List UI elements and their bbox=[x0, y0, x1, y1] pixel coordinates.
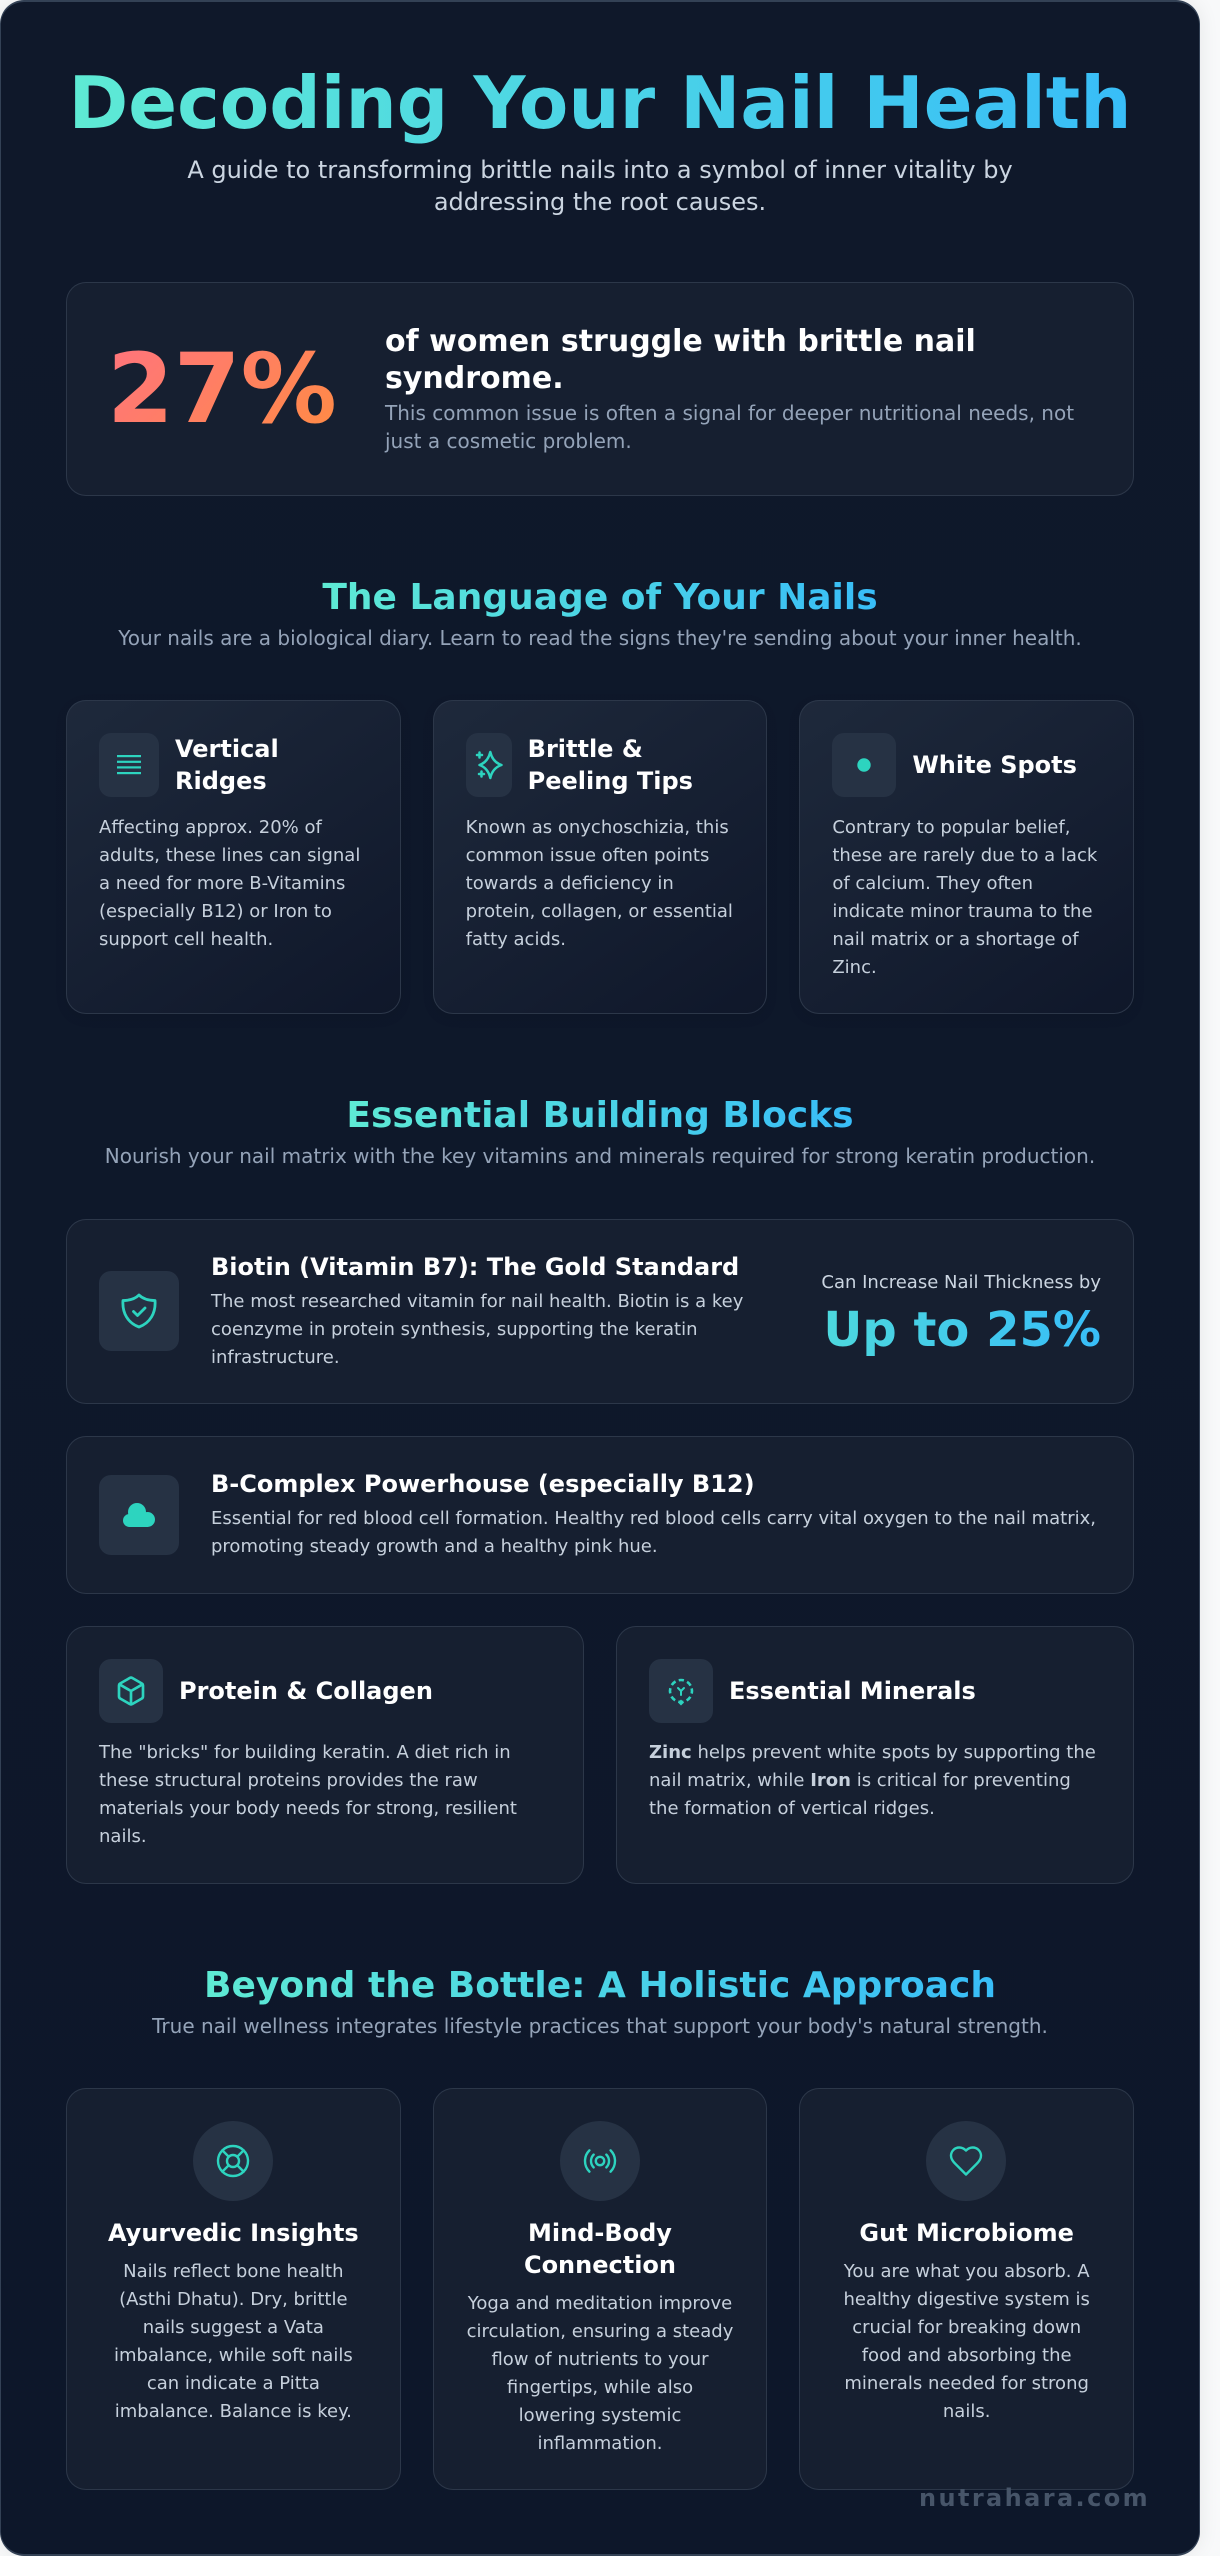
card text: minerals needed for strong bbox=[844, 2373, 1089, 2394]
card text: Zinc. bbox=[832, 957, 877, 978]
card title: Ayurvedic Insights bbox=[108, 2219, 359, 2247]
icon: shield bbox=[99, 1271, 179, 1351]
card text: materials your body needs for strong, resilient bbox=[99, 1798, 517, 1819]
b-complex title: B-Complex Powerhouse (especially B12) bbox=[211, 1470, 755, 1498]
card text: crucial for breaking down bbox=[852, 2317, 1081, 2338]
card text: fatty acids. bbox=[466, 929, 566, 950]
section subtitle: holistic: True nail wellness integrates lifestyle practices that support your body's natural strength. bbox=[152, 2014, 1048, 2038]
stat heading bbox=[385, 324, 976, 396]
panel: b-complex bbox=[66, 1436, 1134, 1594]
card text: indicate minor trauma to the bbox=[832, 901, 1093, 922]
card text bbox=[99, 817, 360, 950]
watermark: nutrahara.com bbox=[919, 2484, 1150, 2512]
panel: gut microbiome bbox=[799, 2088, 1134, 2490]
biotin stat value: Up to 25% bbox=[823, 1302, 1101, 1358]
card title bbox=[175, 735, 279, 795]
panel: vertical ridges bbox=[66, 700, 401, 1014]
card text bbox=[649, 1742, 1096, 1819]
card text bbox=[832, 817, 1098, 978]
panel: protein and collagen bbox=[66, 1626, 584, 1884]
card text: nail matrix, while Iron is critical for preventing bbox=[649, 1770, 1071, 1791]
stat heading: syndrome. bbox=[385, 361, 564, 396]
card title bbox=[528, 735, 693, 795]
card text: (especially B12) or Iron to bbox=[99, 901, 332, 922]
panel: biotin bbox=[66, 1219, 1134, 1404]
section heading: holistic: Beyond the Bottle: A Holistic Approach bbox=[204, 1965, 996, 2006]
icon: ridges bbox=[99, 733, 159, 797]
card text: these are rarely due to a lack bbox=[832, 845, 1097, 866]
card text bbox=[114, 2261, 353, 2422]
card text: nails. bbox=[943, 2401, 990, 2422]
icon: cloud bbox=[99, 1475, 179, 1555]
card text: (Asthi Dhatu). Dry, brittle bbox=[119, 2289, 348, 2310]
card text: common issue often points bbox=[466, 845, 709, 866]
card text: support cell health. bbox=[99, 929, 273, 950]
card title: Peeling Tips bbox=[528, 767, 693, 795]
icon: dashed mineral bbox=[649, 1659, 713, 1723]
card title bbox=[524, 2219, 676, 2279]
card text: Zinc helps prevent white spots by supporting the bbox=[649, 1742, 1096, 1763]
card text bbox=[98, 1742, 517, 1847]
biotin title: Biotin (Vitamin B7): The Gold Standard bbox=[211, 1253, 739, 1281]
card title: White Spots bbox=[912, 751, 1077, 779]
stat description bbox=[384, 401, 1074, 453]
biotin stat label: Can Increase Nail Thickness by bbox=[821, 1272, 1101, 1293]
card title: Connection bbox=[524, 2251, 676, 2279]
card text: nails. bbox=[99, 1826, 147, 1847]
card text: fingertips, while also bbox=[507, 2377, 693, 2398]
biotin text bbox=[210, 1291, 743, 1368]
panel: mind-body connection bbox=[433, 2088, 767, 2490]
card text: Contrary to popular belief, bbox=[832, 817, 1070, 838]
card text: of calcium. They often bbox=[832, 873, 1033, 894]
card text: circulation, ensuring a steady bbox=[467, 2321, 733, 2342]
biotin text: infrastructure. bbox=[211, 1347, 340, 1368]
biotin text: The most researched vitamin for nail health. Biotin is a key bbox=[211, 1291, 743, 1312]
subtitle: addressing the root causes. bbox=[434, 188, 766, 216]
card text: Affecting approx. 20% of bbox=[99, 817, 322, 838]
card text: You are what you absorb. A bbox=[844, 2261, 1090, 2282]
stat heading: of women struggle with brittle nail bbox=[385, 324, 976, 359]
panel: ayurvedic insights bbox=[66, 2088, 401, 2490]
card title: Mind-Body bbox=[528, 2219, 672, 2247]
card text: Yoga and meditation improve bbox=[468, 2293, 732, 2314]
card text: The "bricks" for building keratin. A diet rich in bbox=[99, 1742, 511, 1763]
b-complex text bbox=[211, 1508, 1096, 1557]
card text: nail matrix or a shortage of bbox=[832, 929, 1079, 950]
section subtitle: language: Your nails are a biological diary. Learn to read the signs they're sending about your inner health. bbox=[118, 626, 1082, 650]
card title: Ridges bbox=[175, 767, 267, 795]
card text: food and absorbing the bbox=[862, 2345, 1072, 2366]
card text: flow of nutrients to your bbox=[491, 2349, 708, 2370]
card title: Brittle & bbox=[528, 735, 643, 763]
card text: healthy digestive system is bbox=[843, 2289, 1090, 2310]
card text: nails suggest a Vata bbox=[143, 2317, 324, 2338]
section heading: building blocks: Essential Building Blocks bbox=[346, 1095, 854, 1136]
card text bbox=[843, 2261, 1090, 2422]
stat description: This common issue is often a signal for deeper nutritional needs, not bbox=[385, 401, 1074, 425]
panel: hero statistic bbox=[66, 282, 1134, 496]
card text: imbalance. Balance is key. bbox=[115, 2401, 352, 2422]
card text: these structural proteins provides the raw bbox=[99, 1770, 478, 1791]
card text: towards a deficiency in bbox=[466, 873, 674, 894]
icon: life buoy bbox=[193, 2121, 273, 2201]
card text: adults, these lines can signal bbox=[99, 845, 360, 866]
card title: Vertical bbox=[175, 735, 279, 763]
card text: a need for more B-Vitamins bbox=[99, 873, 345, 894]
panel: white spots bbox=[799, 700, 1134, 1014]
card title: Essential Minerals bbox=[729, 1677, 976, 1705]
stat description: just a cosmetic problem. bbox=[385, 429, 632, 453]
panel: essential minerals bbox=[616, 1626, 1134, 1884]
icon: sparkle bbox=[466, 733, 512, 797]
section subtitle: building blocks: Nourish your nail matrix with the key vitamins and minerals required for strong keratin production. bbox=[105, 1144, 1095, 1168]
card text bbox=[467, 2293, 733, 2454]
card title: Protein & Collagen bbox=[179, 1677, 433, 1705]
section heading: language: The Language of Your Nails bbox=[322, 577, 878, 618]
icon: cube bbox=[99, 1659, 163, 1723]
card text: the formation of vertical ridges. bbox=[649, 1798, 935, 1819]
card text: lowering systemic bbox=[519, 2405, 681, 2426]
icon: heart bbox=[926, 2121, 1006, 2201]
biotin text: coenzyme in protein synthesis, supporting the keratin bbox=[211, 1319, 698, 1340]
subtitle bbox=[187, 156, 1013, 216]
b-complex text: promoting steady growth and a healthy pink hue. bbox=[211, 1536, 658, 1557]
card text: Nails reflect bone health bbox=[123, 2261, 344, 2282]
b-complex text: Essential for red blood cell formation. Healthy red blood cells carry vital oxygen to the nail matrix, bbox=[211, 1508, 1096, 1529]
card text: protein, collagen, or essential bbox=[466, 901, 733, 922]
card text: imbalance, while soft nails bbox=[114, 2345, 353, 2366]
panel: brittle tips bbox=[433, 700, 767, 1014]
title: Decoding Your Nail Health bbox=[69, 61, 1131, 145]
icon: dot bbox=[832, 733, 896, 797]
icon: radio waves bbox=[560, 2121, 640, 2201]
card text: can indicate a Pitta bbox=[147, 2373, 320, 2394]
card text bbox=[466, 817, 733, 950]
big number: 27% bbox=[107, 333, 337, 445]
card text: Known as onychoschizia, this bbox=[466, 817, 729, 838]
subtitle: A guide to transforming brittle nails into a symbol of inner vitality by bbox=[187, 156, 1013, 184]
card title: Gut Microbiome bbox=[859, 2219, 1074, 2247]
card text: inflammation. bbox=[537, 2433, 663, 2454]
